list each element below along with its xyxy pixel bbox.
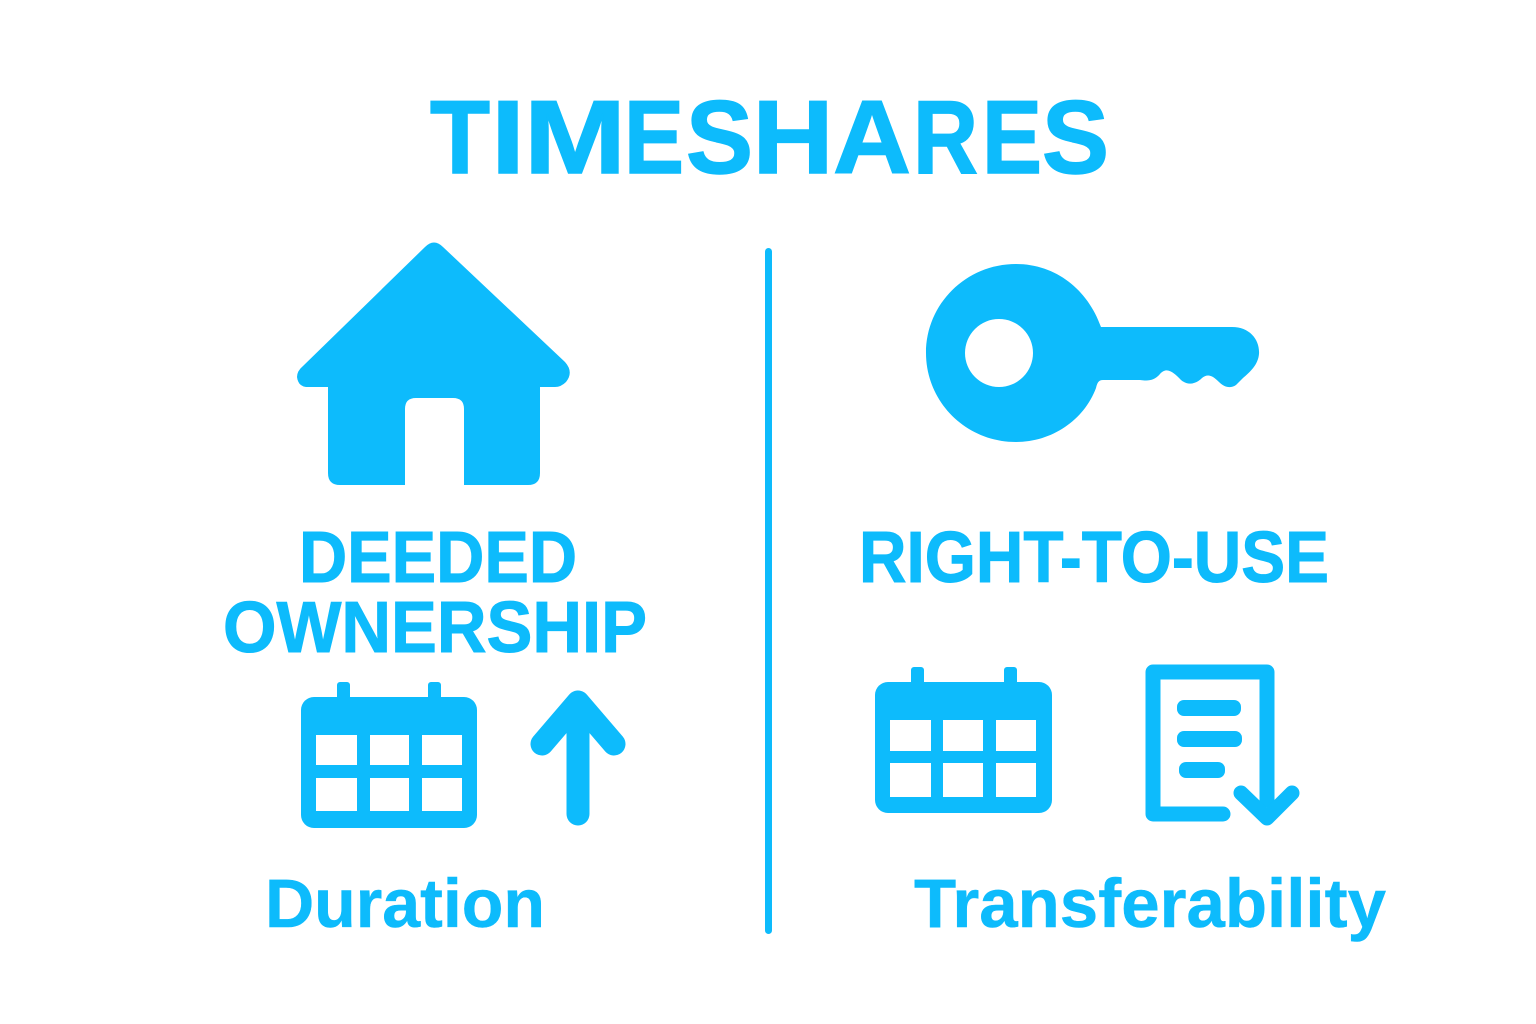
heading: deeded ownership: DEEDED (299, 518, 577, 598)
title: R (913, 80, 978, 196)
divider line (765, 248, 772, 934)
label: transferability: Transferability (914, 865, 1386, 942)
heading: deeded ownership: OWNERSHIP (223, 588, 647, 668)
heading: right-to-use: RIGHT-TO-USE (859, 518, 1329, 598)
icon: document with down arrow (1153, 672, 1292, 818)
title: E (624, 80, 684, 196)
title: H (752, 80, 834, 196)
icon: calendar left (301, 682, 477, 828)
title: E (982, 80, 1042, 196)
title: M (524, 80, 626, 196)
heading: deeded ownership (223, 518, 647, 668)
icon: house (297, 242, 570, 485)
icon: calendar right (875, 667, 1052, 813)
label: duration: Duration (265, 865, 545, 942)
icon: key (926, 264, 1259, 442)
title: T (430, 80, 490, 196)
title: I (491, 80, 525, 196)
title: A (833, 80, 911, 196)
icon: up arrow (542, 702, 614, 814)
title: S (1042, 80, 1109, 196)
title: S (686, 80, 753, 196)
